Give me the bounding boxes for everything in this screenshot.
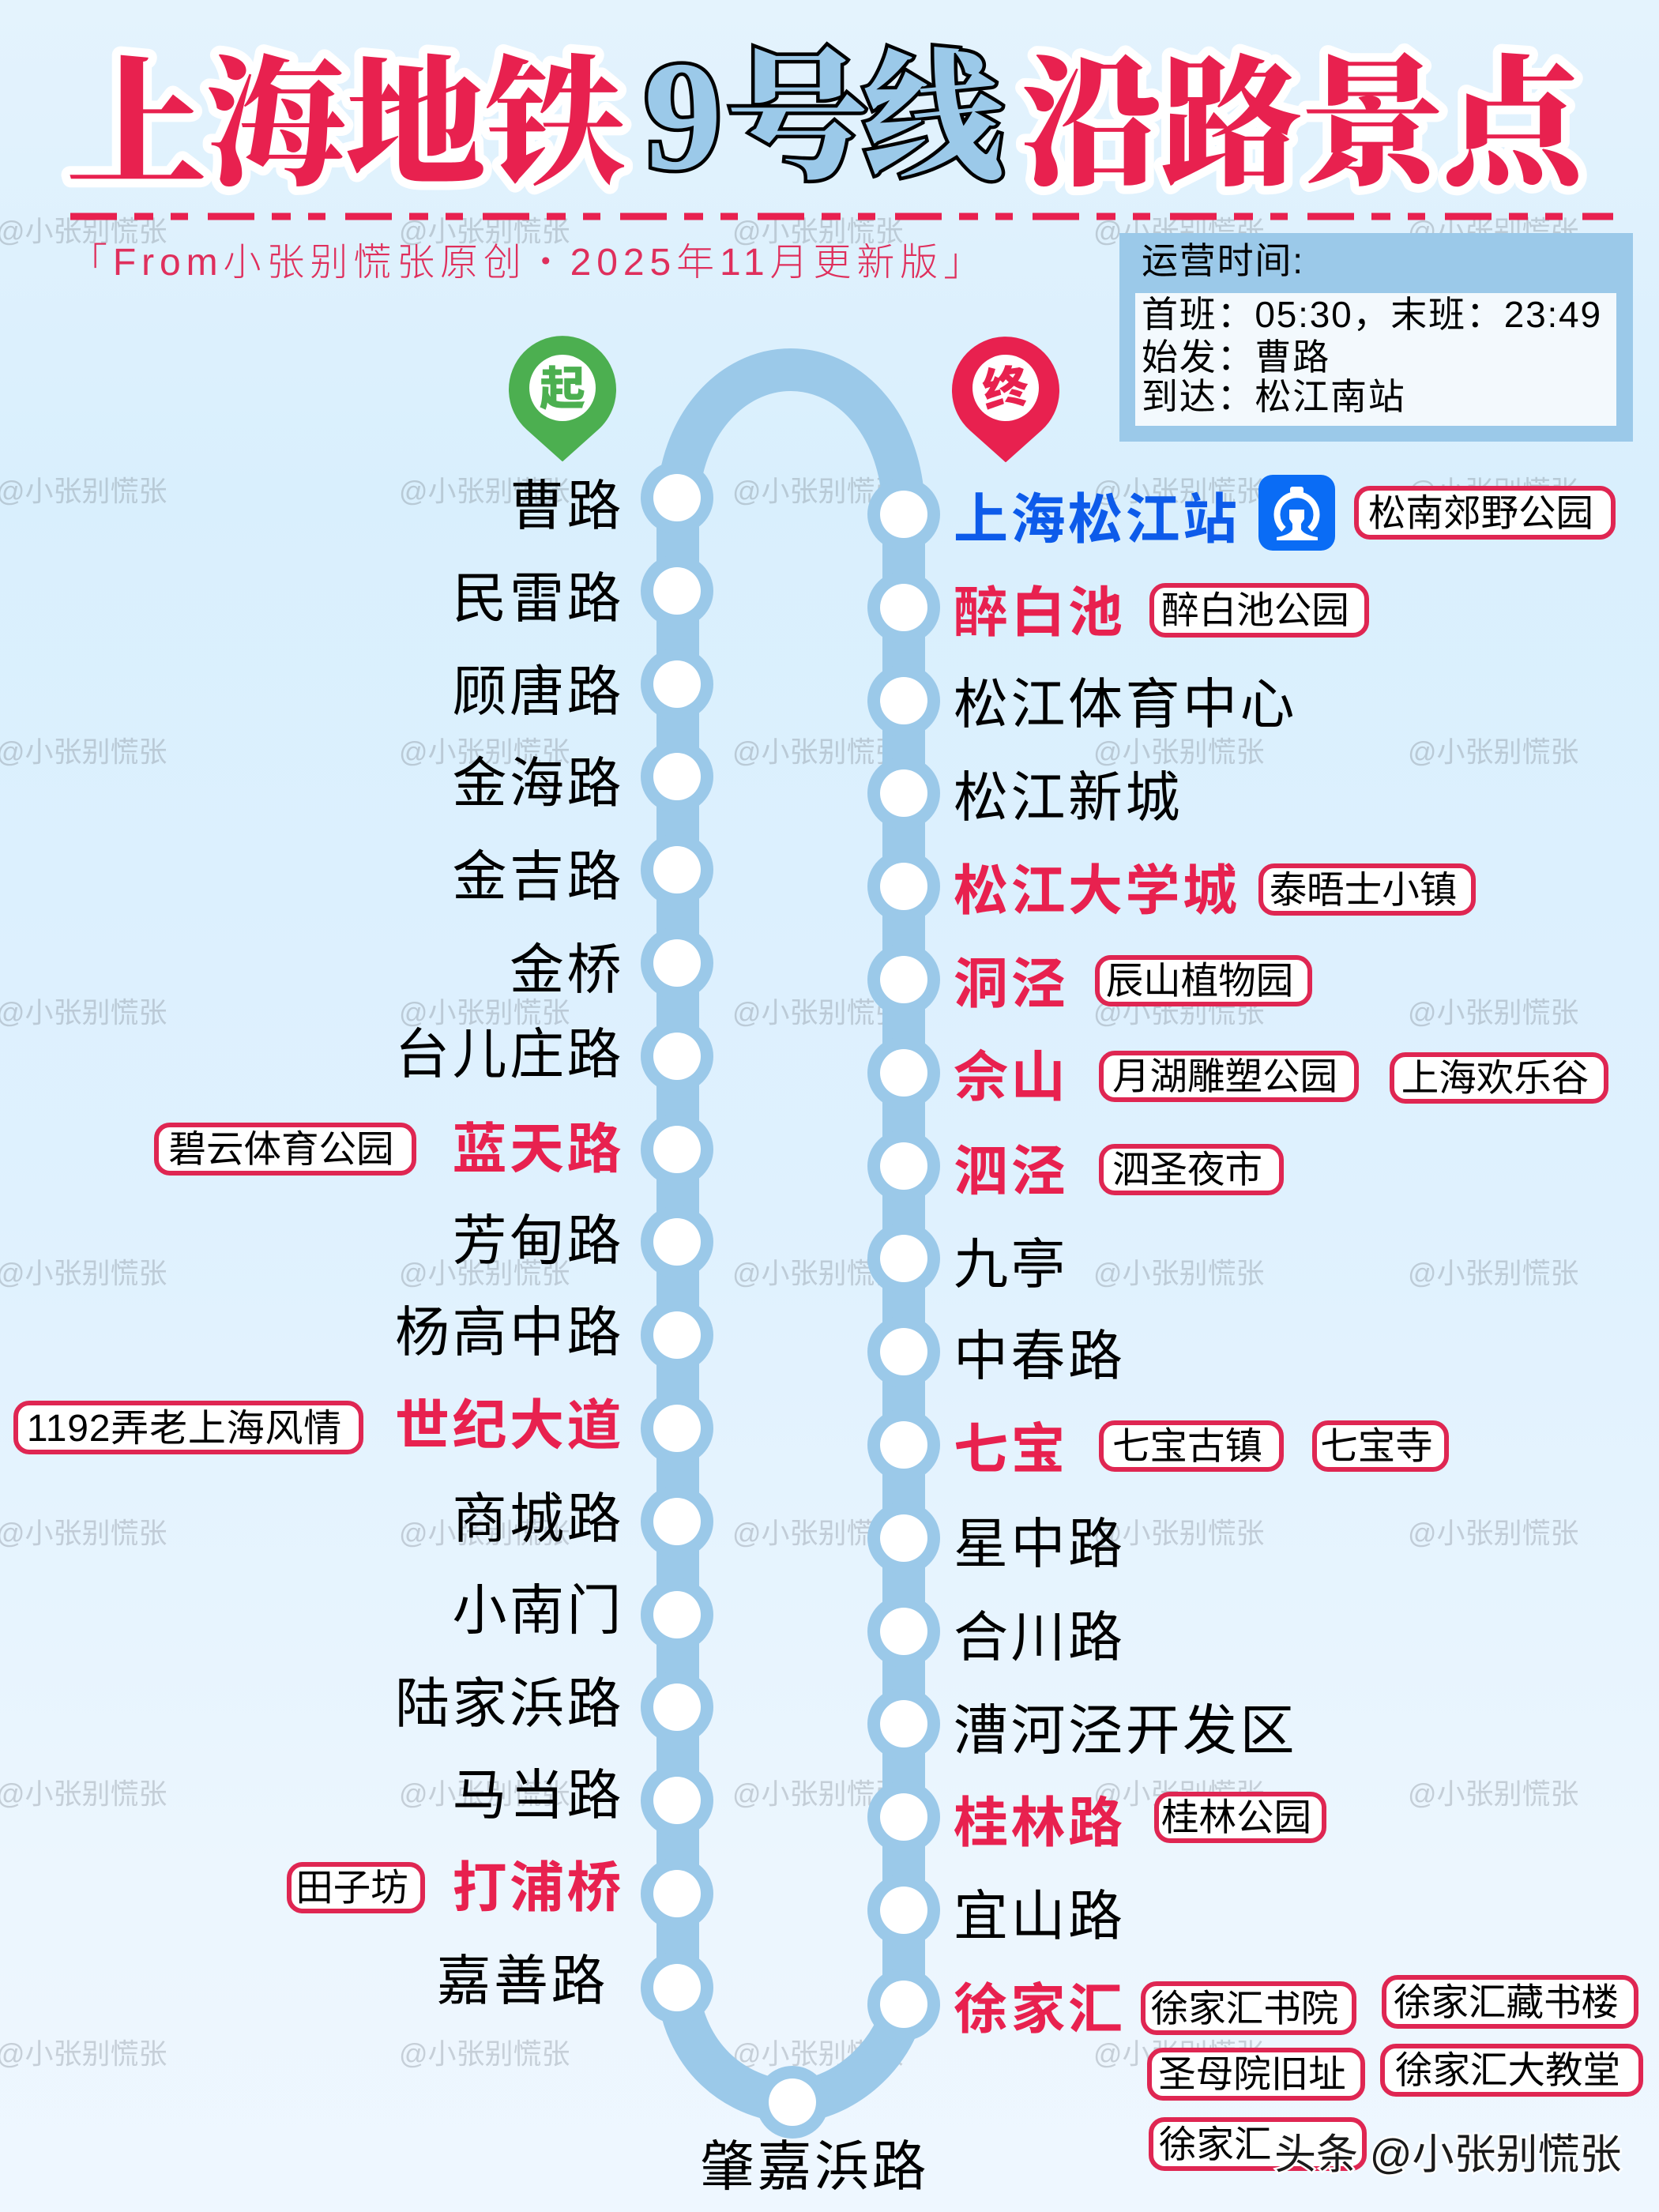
watermarks: @小张别慌张	[0, 1517, 167, 1549]
watermarks: @小张别慌张	[399, 735, 570, 768]
station: 漕河泾开发区: 漕河泾开发区	[954, 1686, 1297, 1765]
tag: 田子坊: 田子坊	[295, 1868, 408, 1909]
watermarks: @小张别慌张	[0, 475, 167, 507]
title: red part two: 沿路景点	[1021, 11, 1594, 213]
title: line 9: 9	[644, 29, 722, 202]
tag: 碧云体育公园: 碧云体育公园	[169, 1129, 393, 1171]
watermarks: @小张别慌张	[732, 1517, 904, 1549]
watermarks: @小张别慌张	[732, 215, 904, 247]
station: 桂林路: 桂林路	[954, 1778, 1125, 1857]
watermarks: @小张别慌张	[732, 2037, 904, 2070]
watermarks: @小张别慌张	[1408, 996, 1579, 1029]
station: 金吉路: 金吉路	[452, 832, 624, 911]
tag: 七宝古镇	[1099, 1420, 1284, 1472]
watermarks: @小张别慌张	[1093, 996, 1265, 1029]
station: 上海松江站: 上海松江站	[954, 475, 1240, 554]
watermarks: @小张别慌张	[399, 2037, 570, 2070]
station: 世纪大道: 世纪大道	[395, 1381, 624, 1460]
station: 台儿庄路: 台儿庄路	[395, 1010, 624, 1089]
metro line 9 track	[678, 370, 904, 2102]
tag: 泗圣夜市: 泗圣夜市	[1112, 1149, 1262, 1191]
station: 蓝天路: 蓝天路	[452, 1104, 624, 1183]
watermarks: @小张别慌张	[1408, 475, 1579, 507]
watermarks: @小张别慌张	[732, 1257, 904, 1289]
watermarks: @小张别慌张	[1408, 1517, 1579, 1549]
watermarks: @小张别慌张	[1408, 1257, 1579, 1289]
station: 商城路: 商城路	[452, 1474, 624, 1553]
watermarks: @小张别慌张	[399, 1778, 570, 1810]
station: 洞泾: 洞泾	[954, 939, 1068, 1018]
icon: end pin: 终	[978, 348, 1033, 421]
tag: 桂林公园: 桂林公园	[1161, 1797, 1311, 1839]
tag: 泰晤士小镇: 泰晤士小镇	[1270, 870, 1457, 912]
station: 星中路: 星中路	[954, 1499, 1125, 1578]
info first and last train: 首班：05:30，末班：23:49	[1142, 294, 1602, 335]
watermarks: @小张别慌张	[399, 1517, 570, 1549]
tag: 徐家汇 partly hidden by platform watermark	[1149, 2117, 1367, 2171]
station: 马当路: 马当路	[452, 1751, 624, 1830]
station: 民雷路: 民雷路	[452, 554, 624, 633]
station: 打浦桥: 打浦桥	[452, 1843, 624, 1922]
icon: china railway logo	[1258, 475, 1335, 551]
station markers: left column	[641, 461, 713, 2024]
watermarks: @小张别慌张	[1093, 1257, 1265, 1289]
station: 杨高中路: 杨高中路	[395, 1288, 624, 1367]
watermarks: @小张别慌张	[1093, 2037, 1265, 2070]
watermarks: @小张别慌张	[732, 475, 904, 507]
watermarks: @小张别慌张	[399, 475, 570, 507]
watermarks: @小张别慌张	[0, 1257, 167, 1289]
tag: 泰晤士小镇	[1258, 863, 1476, 916]
station: 肇嘉浜路: 肇嘉浜路	[700, 2122, 929, 2201]
title: 号线: 号线	[727, 5, 1003, 207]
tag: 上海欢乐谷	[1390, 1052, 1608, 1104]
tag: 徐家汇书院	[1141, 1981, 1356, 2035]
tag: 七宝古镇: 七宝古镇	[1112, 1426, 1262, 1468]
watermarks: @小张别慌张	[0, 996, 167, 1029]
station: 金桥: 金桥	[510, 925, 624, 1004]
watermarks: @小张别慌张	[1093, 1517, 1265, 1549]
station: 松江大学城: 松江大学城	[954, 846, 1240, 925]
watermarks: @小张别慌张	[1093, 1778, 1265, 1810]
tag: 徐家汇藏书楼: 徐家汇藏书楼	[1394, 1982, 1619, 2024]
tag: 1192弄老上海风情: 1192弄老上海风情	[27, 1408, 342, 1449]
station marker: bottom 肇嘉浜路	[756, 2066, 829, 2139]
icon: start pin: 起	[540, 352, 585, 418]
station: 九亭: 九亭	[954, 1220, 1068, 1299]
watermarks: @小张别慌张	[732, 1778, 904, 1810]
tag: 醉白池公园: 醉白池公园	[1161, 590, 1349, 632]
station: 佘山: 佘山	[954, 1033, 1068, 1112]
watermarks: @小张别慌张	[0, 1778, 167, 1810]
watermarks: @小张别慌张	[399, 996, 570, 1029]
station: 宜山路: 宜山路	[954, 1872, 1125, 1951]
watermarks: @小张别慌张	[732, 735, 904, 768]
watermarks: @小张别慌张	[399, 1257, 570, 1289]
tag: 圣母院旧址	[1147, 2048, 1365, 2101]
watermarks: @小张别慌张	[1093, 215, 1265, 247]
station: 金海路: 金海路	[452, 739, 624, 818]
info panel inner white box	[1135, 293, 1616, 426]
info panel: operating hours	[1119, 233, 1633, 442]
tag: 七宝寺: 七宝寺	[1320, 1426, 1433, 1468]
watermarks: @小张别慌张	[0, 2037, 167, 2070]
tag: 碧云体育公园	[154, 1123, 416, 1176]
tag: 圣母院旧址: 圣母院旧址	[1158, 2054, 1346, 2096]
watermarks: @小张别慌张	[1408, 1778, 1579, 1810]
watermarks: @小张别慌张	[1408, 215, 1579, 247]
station markers: right column	[867, 478, 940, 2041]
station: 小南门: 小南门	[452, 1566, 624, 1645]
tag: 七宝寺	[1312, 1420, 1449, 1472]
info terminus: 到达：松江南站	[1142, 376, 1406, 417]
tag: 徐家汇 partly hidden by platform watermark: 徐家汇	[1159, 2124, 1272, 2166]
watermarks: @小张别慌张	[0, 735, 167, 768]
tag: 泗圣夜市	[1099, 1144, 1284, 1195]
icon: start pin	[510, 337, 615, 461]
subtitle: 「From小张别慌张原创・2025年11月更新版」	[70, 242, 987, 284]
tag: 上海欢乐谷: 上海欢乐谷	[1401, 1058, 1589, 1100]
tag: 徐家汇大教堂: 徐家汇大教堂	[1395, 2050, 1620, 2092]
info origin: 始发：曹路	[1142, 337, 1330, 378]
station: 徐家汇: 徐家汇	[954, 1965, 1125, 2044]
tag: 徐家汇藏书楼	[1382, 1975, 1638, 2029]
watermarks: @小张别慌张	[399, 215, 570, 247]
watermarks: @小张别慌张	[1093, 735, 1265, 768]
station: 泗泾: 泗泾	[954, 1127, 1068, 1206]
watermarks: @小张别慌张	[0, 215, 167, 247]
station: 合川路: 合川路	[954, 1593, 1125, 1672]
tag: 月湖雕塑公园: 月湖雕塑公园	[1112, 1056, 1337, 1098]
station: 中春路: 中春路	[954, 1311, 1125, 1390]
station: 醉白池: 醉白池	[954, 568, 1125, 647]
tag: 徐家汇书院: 徐家汇书院	[1151, 1988, 1338, 2030]
tag: 田子坊	[287, 1862, 425, 1913]
watermarks: @小张别慌张	[1408, 735, 1579, 768]
tag: 松南郊野公园: 松南郊野公园	[1368, 493, 1593, 535]
platform watermark: 头条 @小张别慌张	[1274, 2131, 1622, 2178]
watermarks: @小张别慌张	[1093, 475, 1265, 507]
tag: 松南郊野公园	[1354, 486, 1616, 540]
title	[66, 5, 1594, 213]
title: red part one: 上海地铁	[66, 11, 624, 213]
icon: end pin	[953, 337, 1059, 461]
info heading: 运营时间:	[1142, 240, 1304, 281]
title dashed divider	[70, 213, 1613, 220]
station: 陆家浜路: 陆家浜路	[395, 1659, 624, 1738]
tag: 醉白池公园	[1149, 583, 1369, 638]
station: 松江新城: 松江新城	[954, 753, 1183, 832]
station: 嘉善路: 嘉善路	[436, 1936, 608, 2015]
station: 顾唐路: 顾唐路	[452, 647, 624, 726]
station: 曹路: 曹路	[510, 461, 624, 540]
station: 松江体育中心: 松江体育中心	[954, 660, 1297, 739]
watermarks: @小张别慌张	[732, 996, 904, 1029]
tag: 徐家汇大教堂	[1380, 2044, 1643, 2097]
tag: 辰山植物园: 辰山植物园	[1106, 961, 1293, 1003]
station: 七宝: 七宝	[954, 1405, 1068, 1484]
station: 芳甸路: 芳甸路	[452, 1196, 624, 1275]
